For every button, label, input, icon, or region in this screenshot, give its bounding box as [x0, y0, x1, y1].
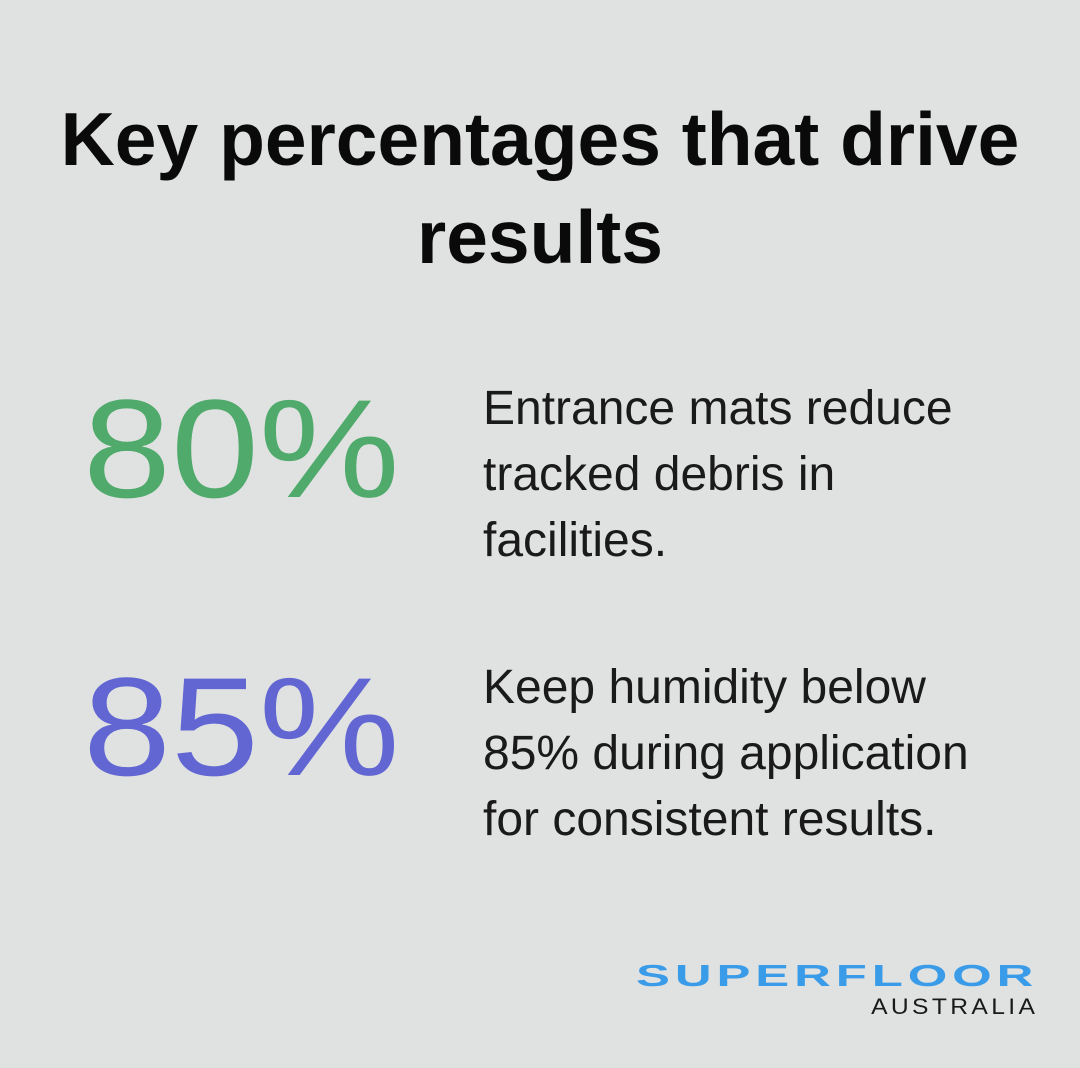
title: results — [417, 195, 663, 279]
title: Key percentages that drive — [61, 97, 1019, 181]
logo — [636, 958, 1038, 1019]
logo: AUSTRALIA — [871, 994, 1038, 1019]
text: entrance mats: facilities. — [483, 514, 667, 567]
text: humidity — [483, 661, 969, 846]
title — [61, 97, 1019, 279]
text: entrance mats — [483, 382, 953, 567]
text: humidity: Keep humidity below — [483, 661, 926, 714]
logo: SUPERFLOOR — [636, 958, 1038, 993]
text: entrance mats: Entrance mats reduce — [483, 382, 953, 435]
stat: 80%: 80% — [83, 370, 400, 527]
text: humidity: 85% during application — [483, 727, 969, 780]
stat: 85%: 85% — [83, 648, 400, 805]
text: humidity: for consistent results. — [483, 793, 937, 846]
text: entrance mats: tracked debris in — [483, 448, 835, 501]
